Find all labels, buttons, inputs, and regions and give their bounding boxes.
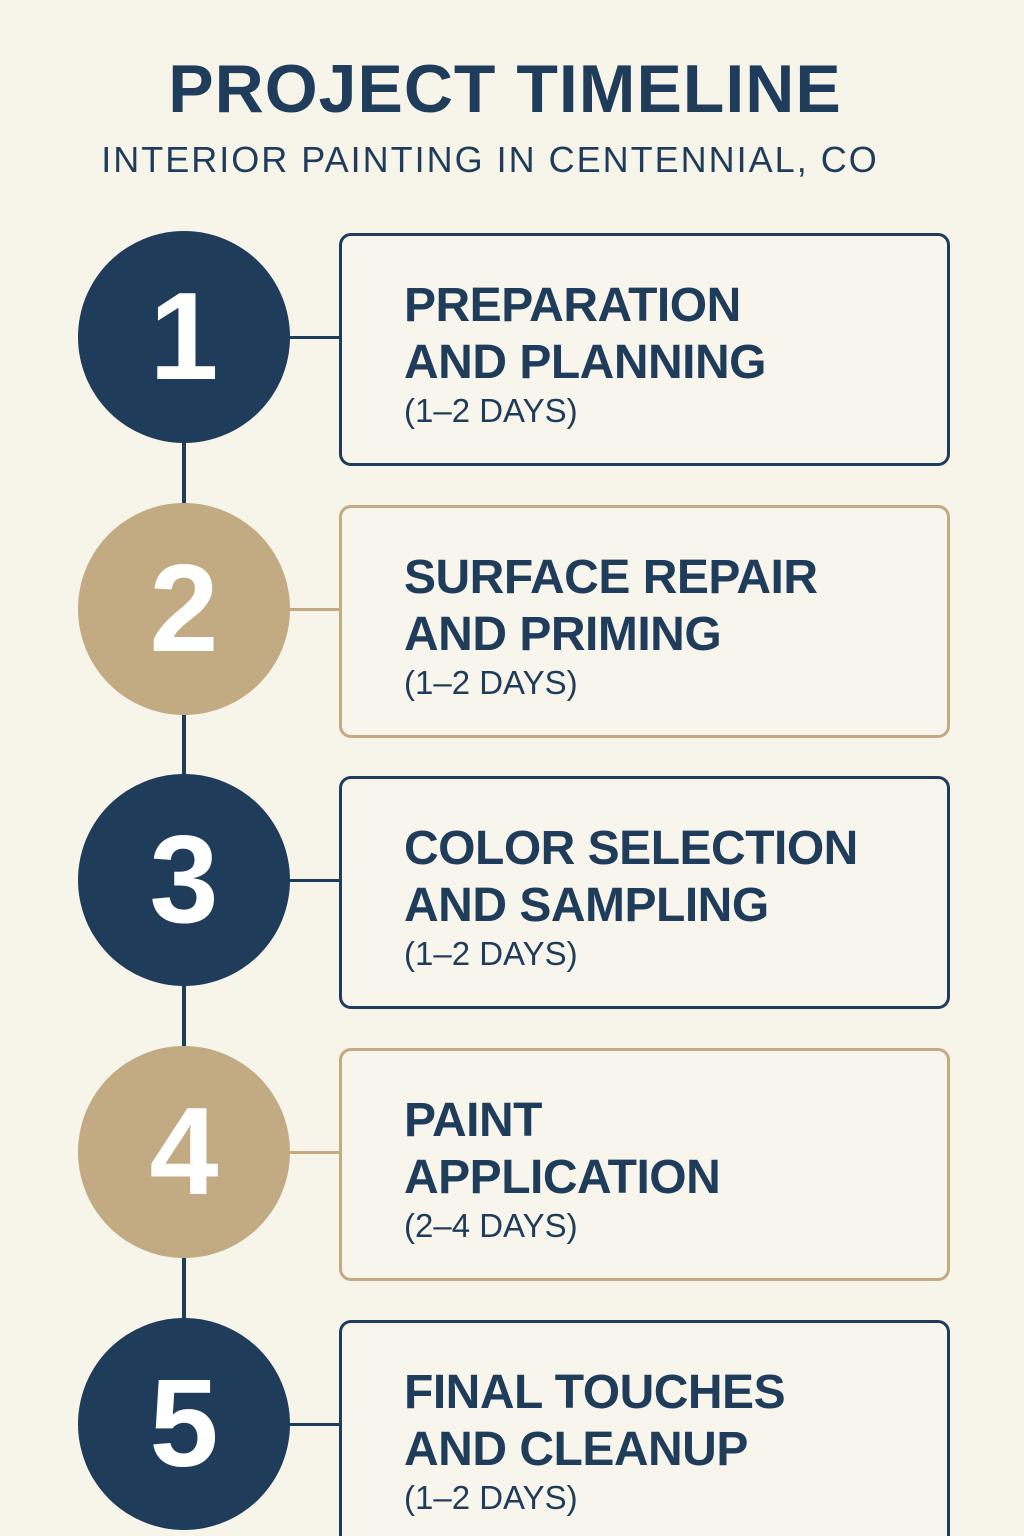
step 5: AND CLEANUP: [404, 1423, 748, 1476]
step 2: AND PRIMING: [404, 608, 721, 661]
step 1: (1–2 DAYS): [404, 392, 578, 429]
step 4: 4: [150, 1083, 218, 1221]
step 4: [78, 1046, 950, 1281]
title: PROJECT TIMELINE: [168, 51, 842, 127]
step 4: PAINT: [404, 1094, 542, 1147]
step 2: SURFACE REPAIR: [404, 551, 818, 604]
step 5: [78, 1318, 950, 1536]
step 2: 2: [150, 540, 218, 678]
step 2: (1–2 DAYS): [404, 664, 578, 701]
step 1: AND PLANNING: [404, 336, 766, 389]
step 3: [78, 774, 950, 1009]
step 3: COLOR SELECTION: [404, 822, 858, 875]
subtitle: INTERIOR PAINTING IN CENTENNIAL, CO: [101, 139, 879, 180]
step 4: APPLICATION: [404, 1151, 720, 1204]
step 5: (1–2 DAYS): [404, 1479, 578, 1516]
step 3: 3: [150, 811, 218, 949]
step 1: PREPARATION: [404, 279, 741, 332]
step 3: AND SAMPLING: [404, 879, 769, 932]
step 3: (1–2 DAYS): [404, 935, 578, 972]
step 1: 1: [150, 268, 218, 406]
step 4: (2–4 DAYS): [404, 1207, 578, 1244]
step 5: FINAL TOUCHES: [404, 1366, 785, 1419]
step 5: 5: [150, 1355, 218, 1493]
timeline vertical line: [182, 330, 186, 1430]
step 1: [78, 231, 950, 466]
step 2: [78, 503, 950, 738]
